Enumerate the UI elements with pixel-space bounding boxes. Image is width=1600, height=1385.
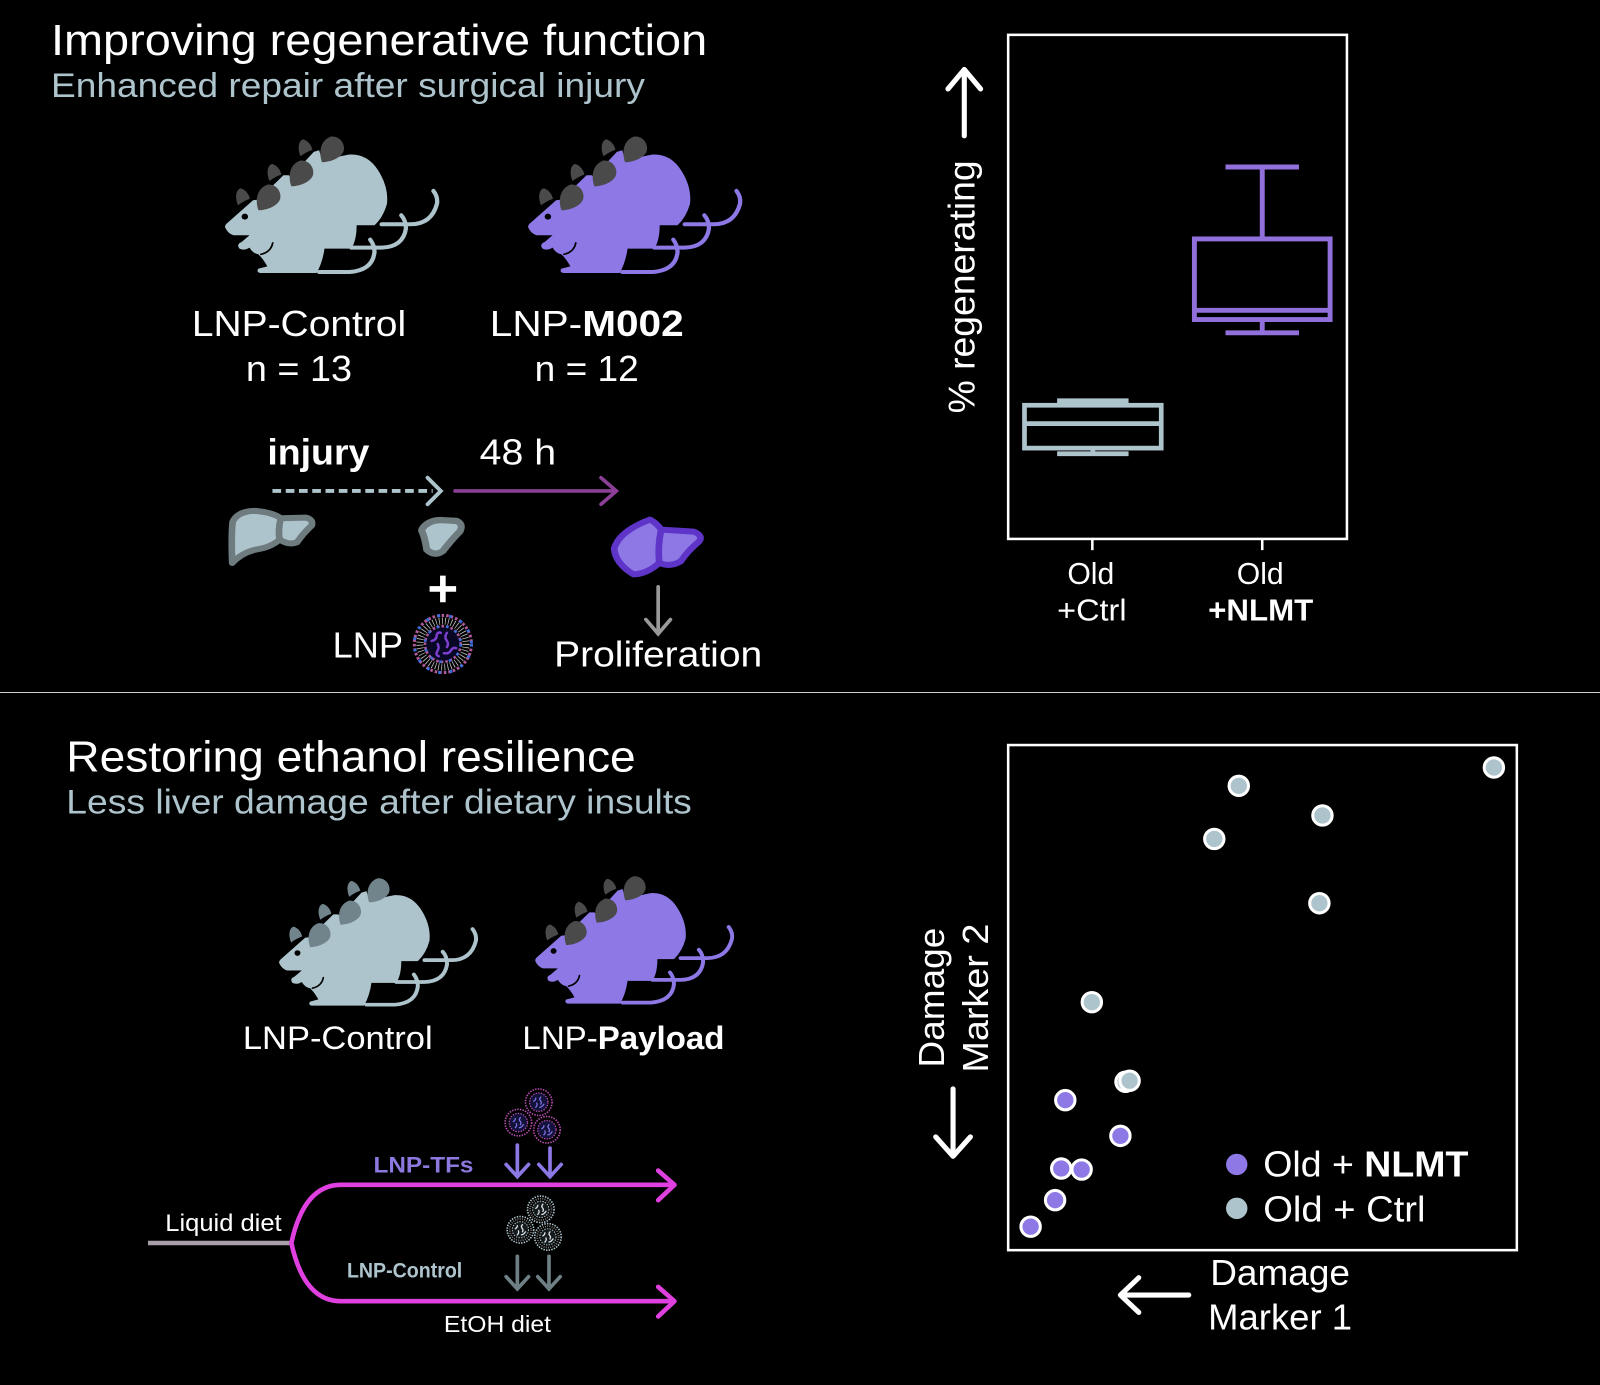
title: Restoring ethanol resilience <box>66 733 636 782</box>
label: 48 h: 48 h <box>480 432 556 472</box>
arrow: 48 hours <box>455 478 616 504</box>
plot frame <box>1008 35 1347 539</box>
panel: improving regenerative function <box>51 16 762 675</box>
subtitle: Enhanced repair after surgical injury <box>51 67 646 105</box>
x label: plus nlmt: +NLMT <box>1208 594 1314 628</box>
liquid diet line <box>148 1241 291 1245</box>
label: EtOH diet: EtOH diet <box>444 1311 552 1337</box>
liquid diet label: Liquid diet <box>165 1210 282 1237</box>
icon: resected liver <box>422 520 461 554</box>
icon: whole liver <box>232 511 312 563</box>
icon: regenerated liver <box>614 520 701 574</box>
icon: treated mice <box>528 136 740 273</box>
x axis arrow <box>1120 1278 1189 1312</box>
label: control group: LNP-Control <box>243 1019 433 1056</box>
legend text: ctrl: Old + Ctrl <box>1263 1190 1426 1230</box>
icon: treatment nanoparticles <box>504 1088 561 1144</box>
x label: damage: Damage <box>1210 1253 1350 1293</box>
title: Improving regenerative function <box>51 16 707 65</box>
icon: control nanoparticles <box>506 1195 562 1251</box>
arrows: control dosing <box>506 1256 560 1289</box>
y label: damage: Damage <box>912 928 952 1068</box>
label: treated n: n = 12 <box>535 349 639 389</box>
icon: control mice <box>279 878 476 1006</box>
y axis arrow <box>948 70 981 136</box>
plot frame <box>1008 745 1517 1250</box>
arrow: to proliferation <box>646 587 670 634</box>
magenta fork arrows <box>291 1171 674 1316</box>
legend swatch: nlmt <box>1226 1154 1247 1175</box>
legend text: nlmt: Old + NLMT <box>1263 1145 1469 1185</box>
label: treated group: LNP- M002 <box>490 304 684 344</box>
y label: marker 2: Marker 2 <box>956 924 996 1073</box>
label: LNP-Control: LNP-Control <box>347 1259 462 1283</box>
label: proliferation: Proliferation <box>554 634 762 674</box>
icon: control mice <box>225 136 437 273</box>
icon: treated mice <box>535 876 732 1004</box>
x label: plus ctrl: +Ctrl <box>1057 594 1127 628</box>
divider line <box>0 692 1600 694</box>
treated points <box>1021 1090 1130 1236</box>
arrows: treatment dosing <box>506 1145 561 1177</box>
y axis arrow <box>936 1089 970 1156</box>
control points <box>1082 758 1504 1091</box>
label: payload group: LNP-Payload <box>522 1019 724 1056</box>
icon: lipid nanoparticle <box>412 613 473 675</box>
box: old + ctrl <box>1024 401 1161 454</box>
legend swatch: ctrl <box>1226 1198 1247 1219</box>
x ticks <box>1092 540 1262 550</box>
subtitle: Less liver damage after dietary insults <box>66 783 692 821</box>
y axis label: % regenerating <box>941 160 982 413</box>
box plot chart <box>941 35 1347 628</box>
x label: marker 1: Marker 1 <box>1208 1298 1352 1338</box>
icon: plus <box>430 576 456 602</box>
label: injury: injury <box>267 432 370 472</box>
label: control group: LNP-Control <box>192 304 406 344</box>
x label: old nlmt: Old <box>1237 557 1284 591</box>
diagram: diet split <box>148 1088 674 1337</box>
legend <box>1226 1145 1469 1230</box>
panel: restoring ethanol resilience <box>66 733 732 1337</box>
arrow: dashed injury step <box>272 478 441 504</box>
label: control n: n = 13 <box>246 349 352 389</box>
label: LNP-TFs: LNP-TFs <box>373 1153 473 1178</box>
box: old + nlmt <box>1194 167 1330 333</box>
x label: old ctrl: Old <box>1067 557 1114 591</box>
scatter plot chart <box>912 745 1517 1338</box>
label: LNP: LNP <box>333 625 403 665</box>
